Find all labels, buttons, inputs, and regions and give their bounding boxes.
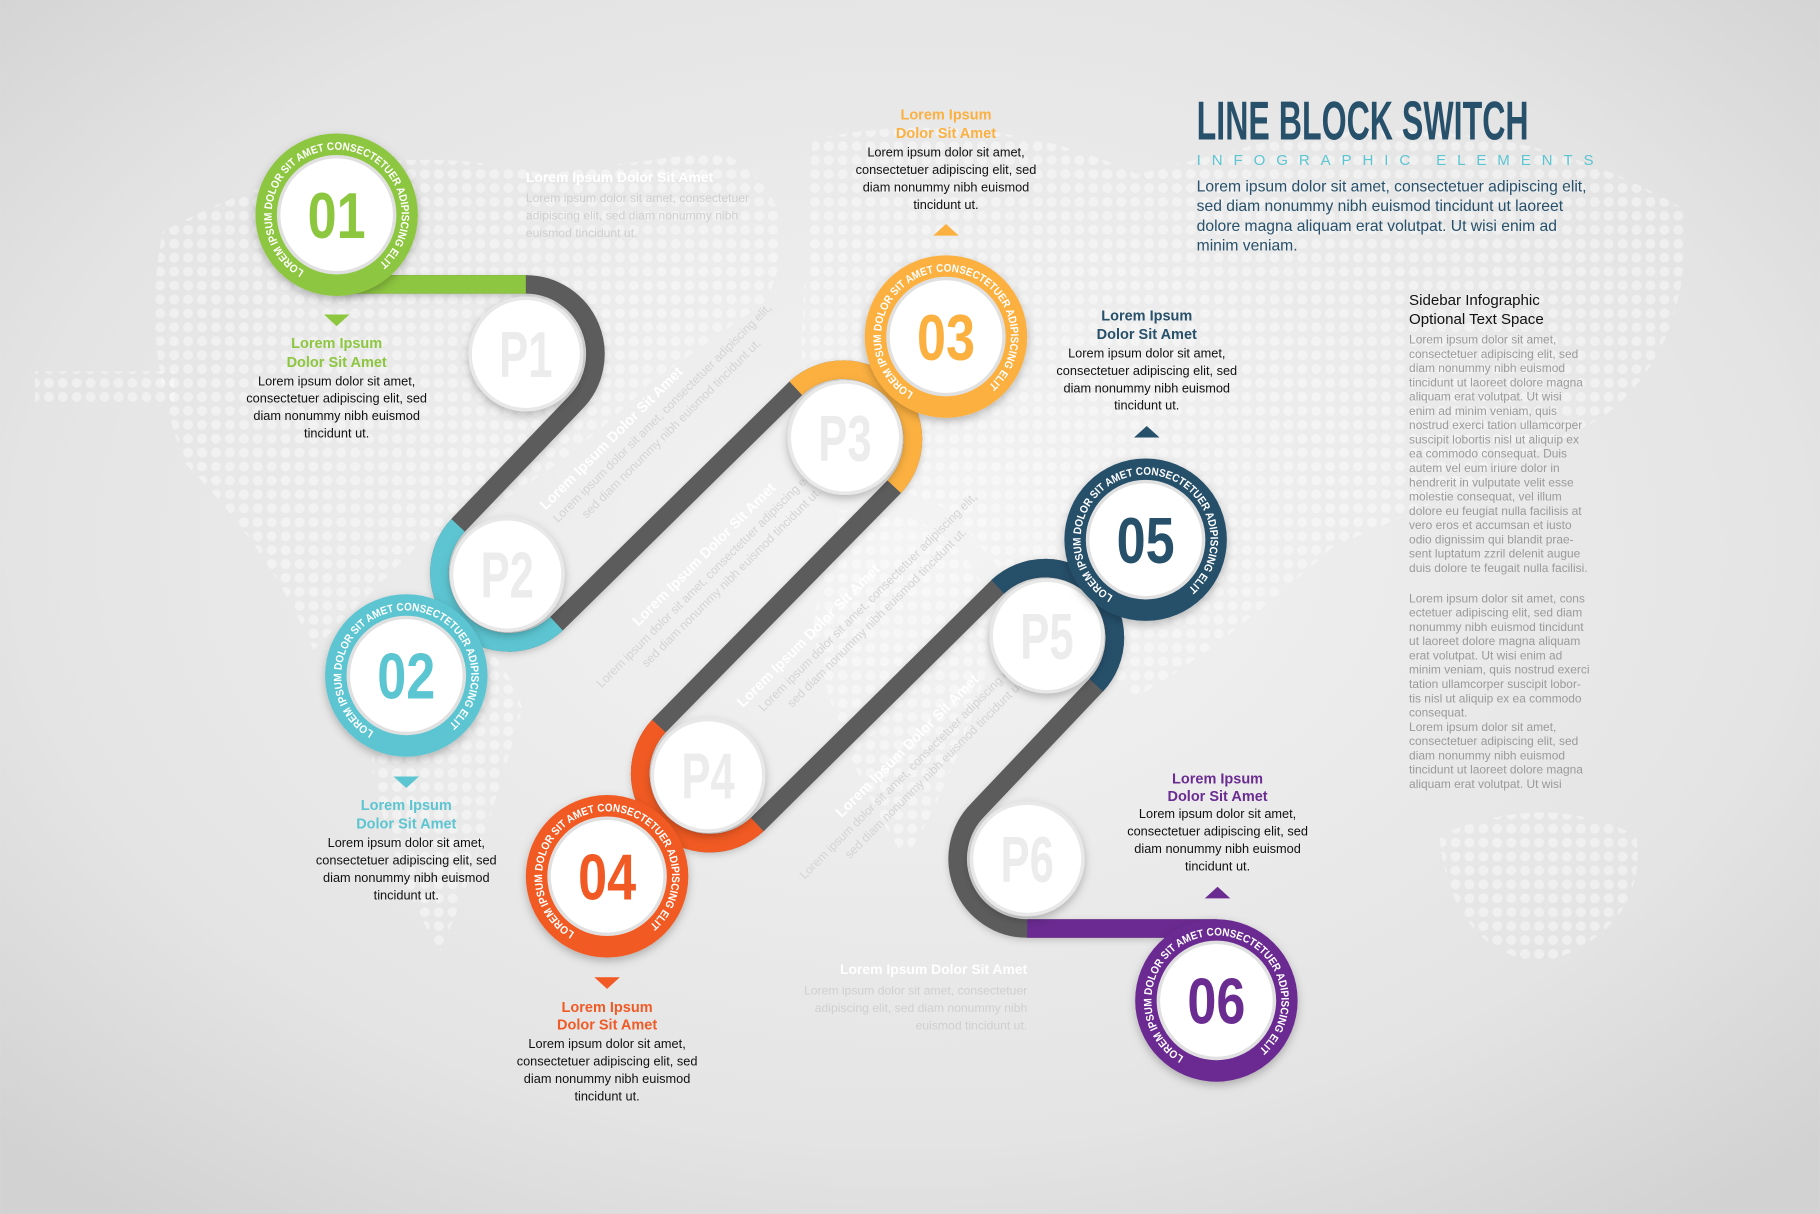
badge 05: 05 bbox=[1117, 504, 1175, 577]
track bbox=[337, 284, 1216, 928]
sidebar: consectetuer adipiscing elit, sed bbox=[1409, 347, 1578, 361]
callout 06: Dolor Sit Amet bbox=[1167, 789, 1268, 805]
badge 05: LOREM IPSUM DOLOR SIT AMET CONSECTETUER ADIPISCING ELIT bbox=[1072, 467, 1218, 602]
callout 01 bbox=[246, 315, 427, 441]
callout 05 bbox=[1056, 308, 1237, 438]
faded text bottom: Lorem ipsum dolor sit amet, consectetuer bbox=[804, 984, 1027, 998]
badge 03 bbox=[860, 254, 1032, 426]
badge 02: 02 bbox=[377, 640, 435, 713]
diagonal faded texts: sed diam nonummy nibh euismod tincidunt ut. bbox=[579, 336, 764, 521]
diagonal faded texts: sed diam nonummy nibh euismod tincidunt ut. bbox=[842, 676, 1027, 861]
badge 01: 01 bbox=[308, 179, 366, 252]
callout 04 bbox=[517, 977, 697, 1103]
badge 02 bbox=[320, 594, 492, 764]
P3 bbox=[789, 382, 901, 493]
diagonal faded texts: Lorem ipsum dolor sit amet, consectetuer adipiscing elit, bbox=[550, 301, 774, 525]
badge 03: 03 bbox=[917, 301, 975, 374]
callout 03: diam nonummy nibh euismod bbox=[863, 180, 1029, 195]
callout 02: diam nonummy nibh euismod bbox=[323, 870, 490, 885]
diagonal faded texts: sed diam nonummy nibh euismod tincidunt ut. bbox=[784, 525, 969, 710]
callout 06 bbox=[1127, 771, 1308, 898]
P1: P1 bbox=[499, 318, 553, 391]
sidebar: odio dignissim qui blandit prae- bbox=[1409, 532, 1574, 546]
intro paragraph: minim veniam. bbox=[1197, 238, 1298, 255]
diagonal faded texts: Lorem Ipsum Dolor Sit Amet bbox=[734, 561, 884, 711]
sidebar bbox=[1409, 292, 1590, 791]
callout 03 bbox=[856, 108, 1036, 236]
faded text top: euismod tincidunt ut. bbox=[526, 226, 637, 240]
sidebar: diam nonummy nibh euismod bbox=[1409, 748, 1565, 762]
faded text top: Lorem ipsum dolor sit amet, consectetuer bbox=[526, 191, 749, 205]
P6: P6 bbox=[1001, 823, 1054, 896]
sidebar: nostrud exerci tation ullamcorper bbox=[1409, 418, 1582, 432]
title: LINE BLOCK SWITCH bbox=[1197, 90, 1529, 151]
sidebar: Lorem ipsum dolor sit amet, cons bbox=[1409, 591, 1585, 605]
sidebar: sent luptatum zzril delenit augue bbox=[1409, 547, 1581, 561]
badge 03: LOREM IPSUM DOLOR SIT AMET CONSECTETUER ADIPISCING ELIT bbox=[873, 264, 1018, 399]
faded text bottom: adipiscing elit, sed diam nonummy nibh bbox=[815, 1001, 1027, 1015]
faded text top bbox=[526, 169, 749, 240]
sidebar: erat volutpat. Ut wisi enim ad bbox=[1409, 648, 1562, 662]
callout 02: Dolor Sit Amet bbox=[356, 817, 457, 833]
sidebar: aliquam erat volutpat. Ut wisi bbox=[1409, 777, 1562, 791]
sidebar: Optional Text Space bbox=[1409, 311, 1544, 328]
callout 06: tincidunt ut. bbox=[1185, 858, 1250, 873]
intro paragraph: Lorem ipsum dolor sit amet, consectetuer adipiscing elit, bbox=[1197, 179, 1587, 196]
callout 06: Lorem Ipsum bbox=[1172, 771, 1263, 787]
badge 06: LOREM IPSUM DOLOR SIT AMET CONSECTETUER ADIPISCING ELIT bbox=[1144, 928, 1289, 1063]
callout 01: Lorem Ipsum bbox=[291, 336, 382, 352]
badge 02: LOREM IPSUM DOLOR SIT AMET CONSECTETUER ADIPISCING ELIT bbox=[334, 602, 479, 738]
P2: P2 bbox=[481, 539, 534, 612]
callout 05: Lorem Ipsum bbox=[1101, 308, 1192, 324]
sidebar: consectetuer adipiscing elit, sed bbox=[1409, 734, 1578, 748]
diagonal faded texts bbox=[537, 288, 1033, 894]
sidebar: duis dolore te feugait nulla facilisi. bbox=[1409, 561, 1588, 575]
sidebar: consequat. bbox=[1409, 706, 1467, 720]
callout 05: Lorem ipsum dolor sit amet, bbox=[1068, 345, 1225, 360]
sidebar: suscipit lobortis nisl ut aliquip ex bbox=[1409, 432, 1579, 446]
sidebar: ectetuer adipiscing elit, sed diam bbox=[1409, 606, 1582, 620]
callout 05: Dolor Sit Amet bbox=[1097, 327, 1197, 343]
sidebar: hendrerit in vulputate velit esse bbox=[1409, 475, 1574, 489]
diagonal faded texts: Lorem Ipsum Dolor Sit Amet bbox=[630, 480, 779, 630]
intro paragraph: dolore magna aliquam erat volutpat. Ut wisi enim ad bbox=[1197, 218, 1557, 235]
callout 02 bbox=[316, 776, 497, 902]
badge 01: LOREM IPSUM DOLOR SIT AMET CONSECTETUER ADIPISCING ELIT bbox=[264, 142, 410, 278]
faded text bottom bbox=[804, 961, 1028, 1032]
sidebar: tincidunt ut laoreet dolore magna bbox=[1409, 763, 1583, 777]
callout 02: consectetuer adipiscing elit, sed bbox=[316, 853, 497, 868]
sidebar: nonummy nibh euismod tincidunt bbox=[1409, 620, 1584, 634]
badge 06: 06 bbox=[1187, 965, 1245, 1038]
sidebar: diam nonummy nibh euismod bbox=[1409, 361, 1565, 375]
callout 06: consectetuer adipiscing elit, sed bbox=[1127, 824, 1308, 839]
callout 01: Dolor Sit Amet bbox=[287, 355, 387, 371]
callout 01: tincidunt ut. bbox=[304, 426, 369, 441]
callout 04: Lorem ipsum dolor sit amet, bbox=[528, 1036, 686, 1051]
subtitle: INFOGRAPHIC ELEMENTS bbox=[1197, 152, 1594, 169]
callout 02: Lorem ipsum dolor sit amet, bbox=[328, 835, 485, 850]
P4 bbox=[652, 720, 764, 831]
callout 03: tincidunt ut. bbox=[913, 197, 979, 212]
callout 01: Lorem ipsum dolor sit amet, bbox=[258, 373, 415, 388]
sidebar: minim veniam, quis nostrud exerci bbox=[1409, 663, 1590, 677]
P1 bbox=[470, 298, 582, 410]
badge 04: LOREM IPSUM DOLOR SIT AMET CONSECTETUER ADIPISCING ELIT bbox=[534, 804, 680, 939]
callout 04: Dolor Sit Amet bbox=[557, 1017, 657, 1033]
callout 05: tincidunt ut. bbox=[1114, 398, 1179, 413]
P circles bbox=[452, 298, 1103, 915]
callout 04: tincidunt ut. bbox=[574, 1088, 640, 1103]
diagonal faded texts: Lorem ipsum dolor sit amet, consectetuer adipiscing elit, bbox=[797, 658, 1021, 882]
callout 02: Lorem Ipsum bbox=[361, 798, 452, 814]
sidebar: ut laoreet dolore magna aliquam bbox=[1409, 634, 1580, 648]
P6 bbox=[972, 803, 1083, 915]
diagonal faded texts: Lorem ipsum dolor sit amet, consectetuer adipiscing elit, bbox=[594, 466, 818, 690]
callout 01: diam nonummy nibh euismod bbox=[253, 408, 420, 423]
callout 06: Lorem ipsum dolor sit amet, bbox=[1139, 806, 1296, 821]
intro paragraph: sed diam nonummy nibh euismod tincidunt ut laoreet bbox=[1197, 198, 1564, 215]
sidebar: tation ullamcorper suscipit lobor- bbox=[1409, 677, 1581, 691]
callout 05: consectetuer adipiscing elit, sed bbox=[1056, 363, 1237, 378]
diagonal faded texts: Lorem Ipsum Dolor Sit Amet bbox=[537, 364, 687, 513]
sidebar: molestie consequat, vel illum bbox=[1409, 490, 1562, 504]
badge 06 bbox=[1130, 918, 1302, 1090]
callout 03: Lorem ipsum dolor sit amet, bbox=[867, 145, 1025, 160]
badge 04: 04 bbox=[578, 840, 636, 913]
faded text top: Lorem Ipsum Dolor Sit Amet bbox=[526, 169, 713, 185]
sidebar: vero eros et accumsan et iusto bbox=[1409, 518, 1572, 532]
callout 06: diam nonummy nibh euismod bbox=[1134, 841, 1301, 856]
sidebar: Lorem ipsum dolor sit amet, bbox=[1409, 333, 1556, 347]
diagonal faded texts: Lorem Ipsum Dolor Sit Amet bbox=[833, 672, 983, 821]
intro paragraph bbox=[1197, 179, 1587, 255]
sidebar: Lorem ipsum dolor sit amet, bbox=[1409, 720, 1556, 734]
callout 01: consectetuer adipiscing elit, sed bbox=[246, 391, 427, 406]
diagonal faded texts: Lorem ipsum dolor sit amet, consectetuer adipiscing elit, bbox=[756, 490, 980, 714]
sidebar: enim ad minim veniam, quis bbox=[1409, 404, 1557, 418]
callout 02: tincidunt ut. bbox=[374, 887, 439, 902]
sidebar: autem vel eum iriure dolor in bbox=[1409, 461, 1560, 475]
badge 05 bbox=[1060, 458, 1232, 629]
P5 bbox=[991, 580, 1103, 692]
sidebar: aliquam erat volutpat. Ut wisi bbox=[1409, 390, 1562, 404]
callout 03: Dolor Sit Amet bbox=[896, 126, 996, 142]
sidebar: ea commodo consequat. Duis bbox=[1409, 447, 1567, 461]
callout 05: diam nonummy nibh euismod bbox=[1063, 380, 1230, 395]
faded text bottom: Lorem Ipsum Dolor Sit Amet bbox=[840, 961, 1028, 977]
world map dots bbox=[35, 128, 1684, 963]
badge 01 bbox=[251, 132, 422, 304]
sidebar: Sidebar Infographic bbox=[1409, 292, 1540, 309]
diagonal faded texts: sed diam nonummy nibh euismod tincidunt ut. bbox=[639, 485, 824, 670]
callout 04: Lorem Ipsum bbox=[562, 1000, 653, 1016]
P3: P3 bbox=[818, 402, 872, 475]
P2 bbox=[452, 519, 563, 630]
callout 03: consectetuer adipiscing elit, sed bbox=[856, 162, 1036, 177]
callout 03: Lorem Ipsum bbox=[900, 108, 992, 124]
callout 04: diam nonummy nibh euismod bbox=[524, 1071, 690, 1086]
sidebar: dolore eu feugiat nulla facilisis at bbox=[1409, 504, 1582, 518]
callout 04: consectetuer adipiscing elit, sed bbox=[517, 1053, 697, 1068]
sidebar: tis nisl ut aliquip ex ea commodo bbox=[1409, 691, 1582, 705]
faded text bottom: euismod tincidunt ut. bbox=[916, 1018, 1027, 1032]
faded text top: adipiscing elit, sed diam nonummy nibh bbox=[526, 208, 738, 222]
P4: P4 bbox=[681, 740, 735, 813]
sidebar: tincidunt ut laoreet dolore magna bbox=[1409, 375, 1583, 389]
P5: P5 bbox=[1020, 600, 1074, 673]
badge 04 bbox=[522, 794, 693, 966]
